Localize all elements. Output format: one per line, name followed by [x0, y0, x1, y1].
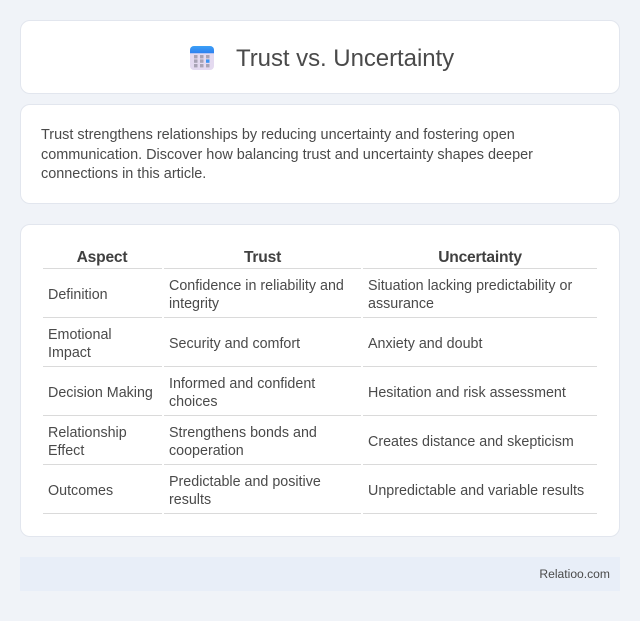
- table header: [77, 249, 522, 266]
- row: relationship effect: cooperation: [169, 443, 244, 459]
- row: emotional impact: Impact: [48, 345, 91, 361]
- row: definition: Definition: [48, 287, 108, 303]
- row: decision making: [48, 376, 566, 410]
- row: decision making: Hesitation and risk assessment: [368, 385, 566, 401]
- row: relationship effect: Relationship: [48, 425, 127, 441]
- panel: title card: [20, 20, 620, 94]
- row: definition: assurance: [368, 296, 434, 312]
- row: definition: Confidence in reliability and: [169, 278, 344, 294]
- panel: introduction: [20, 104, 620, 204]
- row: emotional impact: Security and comfort: [169, 336, 300, 352]
- row: outcomes: [48, 474, 584, 508]
- row: outcomes: Outcomes: [48, 483, 113, 499]
- row: emotional impact: [48, 327, 482, 361]
- row: definition: Situation lacking predictability or: [368, 278, 572, 294]
- row: decision making: Informed and confident: [169, 376, 315, 392]
- intro text: Trust strengthens relationships by reducing uncertainty and fostering open: [41, 127, 515, 143]
- row: outcomes: Unpredictable and variable results: [368, 483, 584, 499]
- row: outcomes: Predictable and positive: [169, 474, 321, 490]
- row: definition: integrity: [169, 296, 219, 312]
- row: outcomes: results: [169, 492, 211, 508]
- table header: Uncertainty: [438, 249, 522, 266]
- icon: calendar: [190, 46, 214, 70]
- table header: Aspect: [77, 249, 127, 266]
- row: relationship effect: Strengthens bonds and: [169, 425, 317, 441]
- row: relationship effect: Creates distance and skepticism: [368, 434, 574, 450]
- panel: comparison table: [20, 224, 620, 537]
- intro text: connections in this article.: [41, 166, 206, 182]
- footer bar: [20, 557, 620, 591]
- row: relationship effect: [48, 425, 574, 459]
- row: decision making: Decision Making: [48, 385, 153, 401]
- row: definition: [48, 278, 572, 312]
- footer text: Relatioo.com: [539, 567, 610, 581]
- table header: Trust: [244, 249, 281, 266]
- row: decision making: choices: [169, 394, 217, 410]
- intro text: communication. Discover how balancing trust and uncertainty shapes deeper: [41, 146, 533, 162]
- row: relationship effect: Effect: [48, 443, 84, 459]
- intro text: [41, 127, 533, 182]
- row: emotional impact: Emotional: [48, 327, 112, 343]
- title: Trust vs. Uncertainty: [236, 45, 454, 72]
- row: emotional impact: Anxiety and doubt: [368, 336, 482, 352]
